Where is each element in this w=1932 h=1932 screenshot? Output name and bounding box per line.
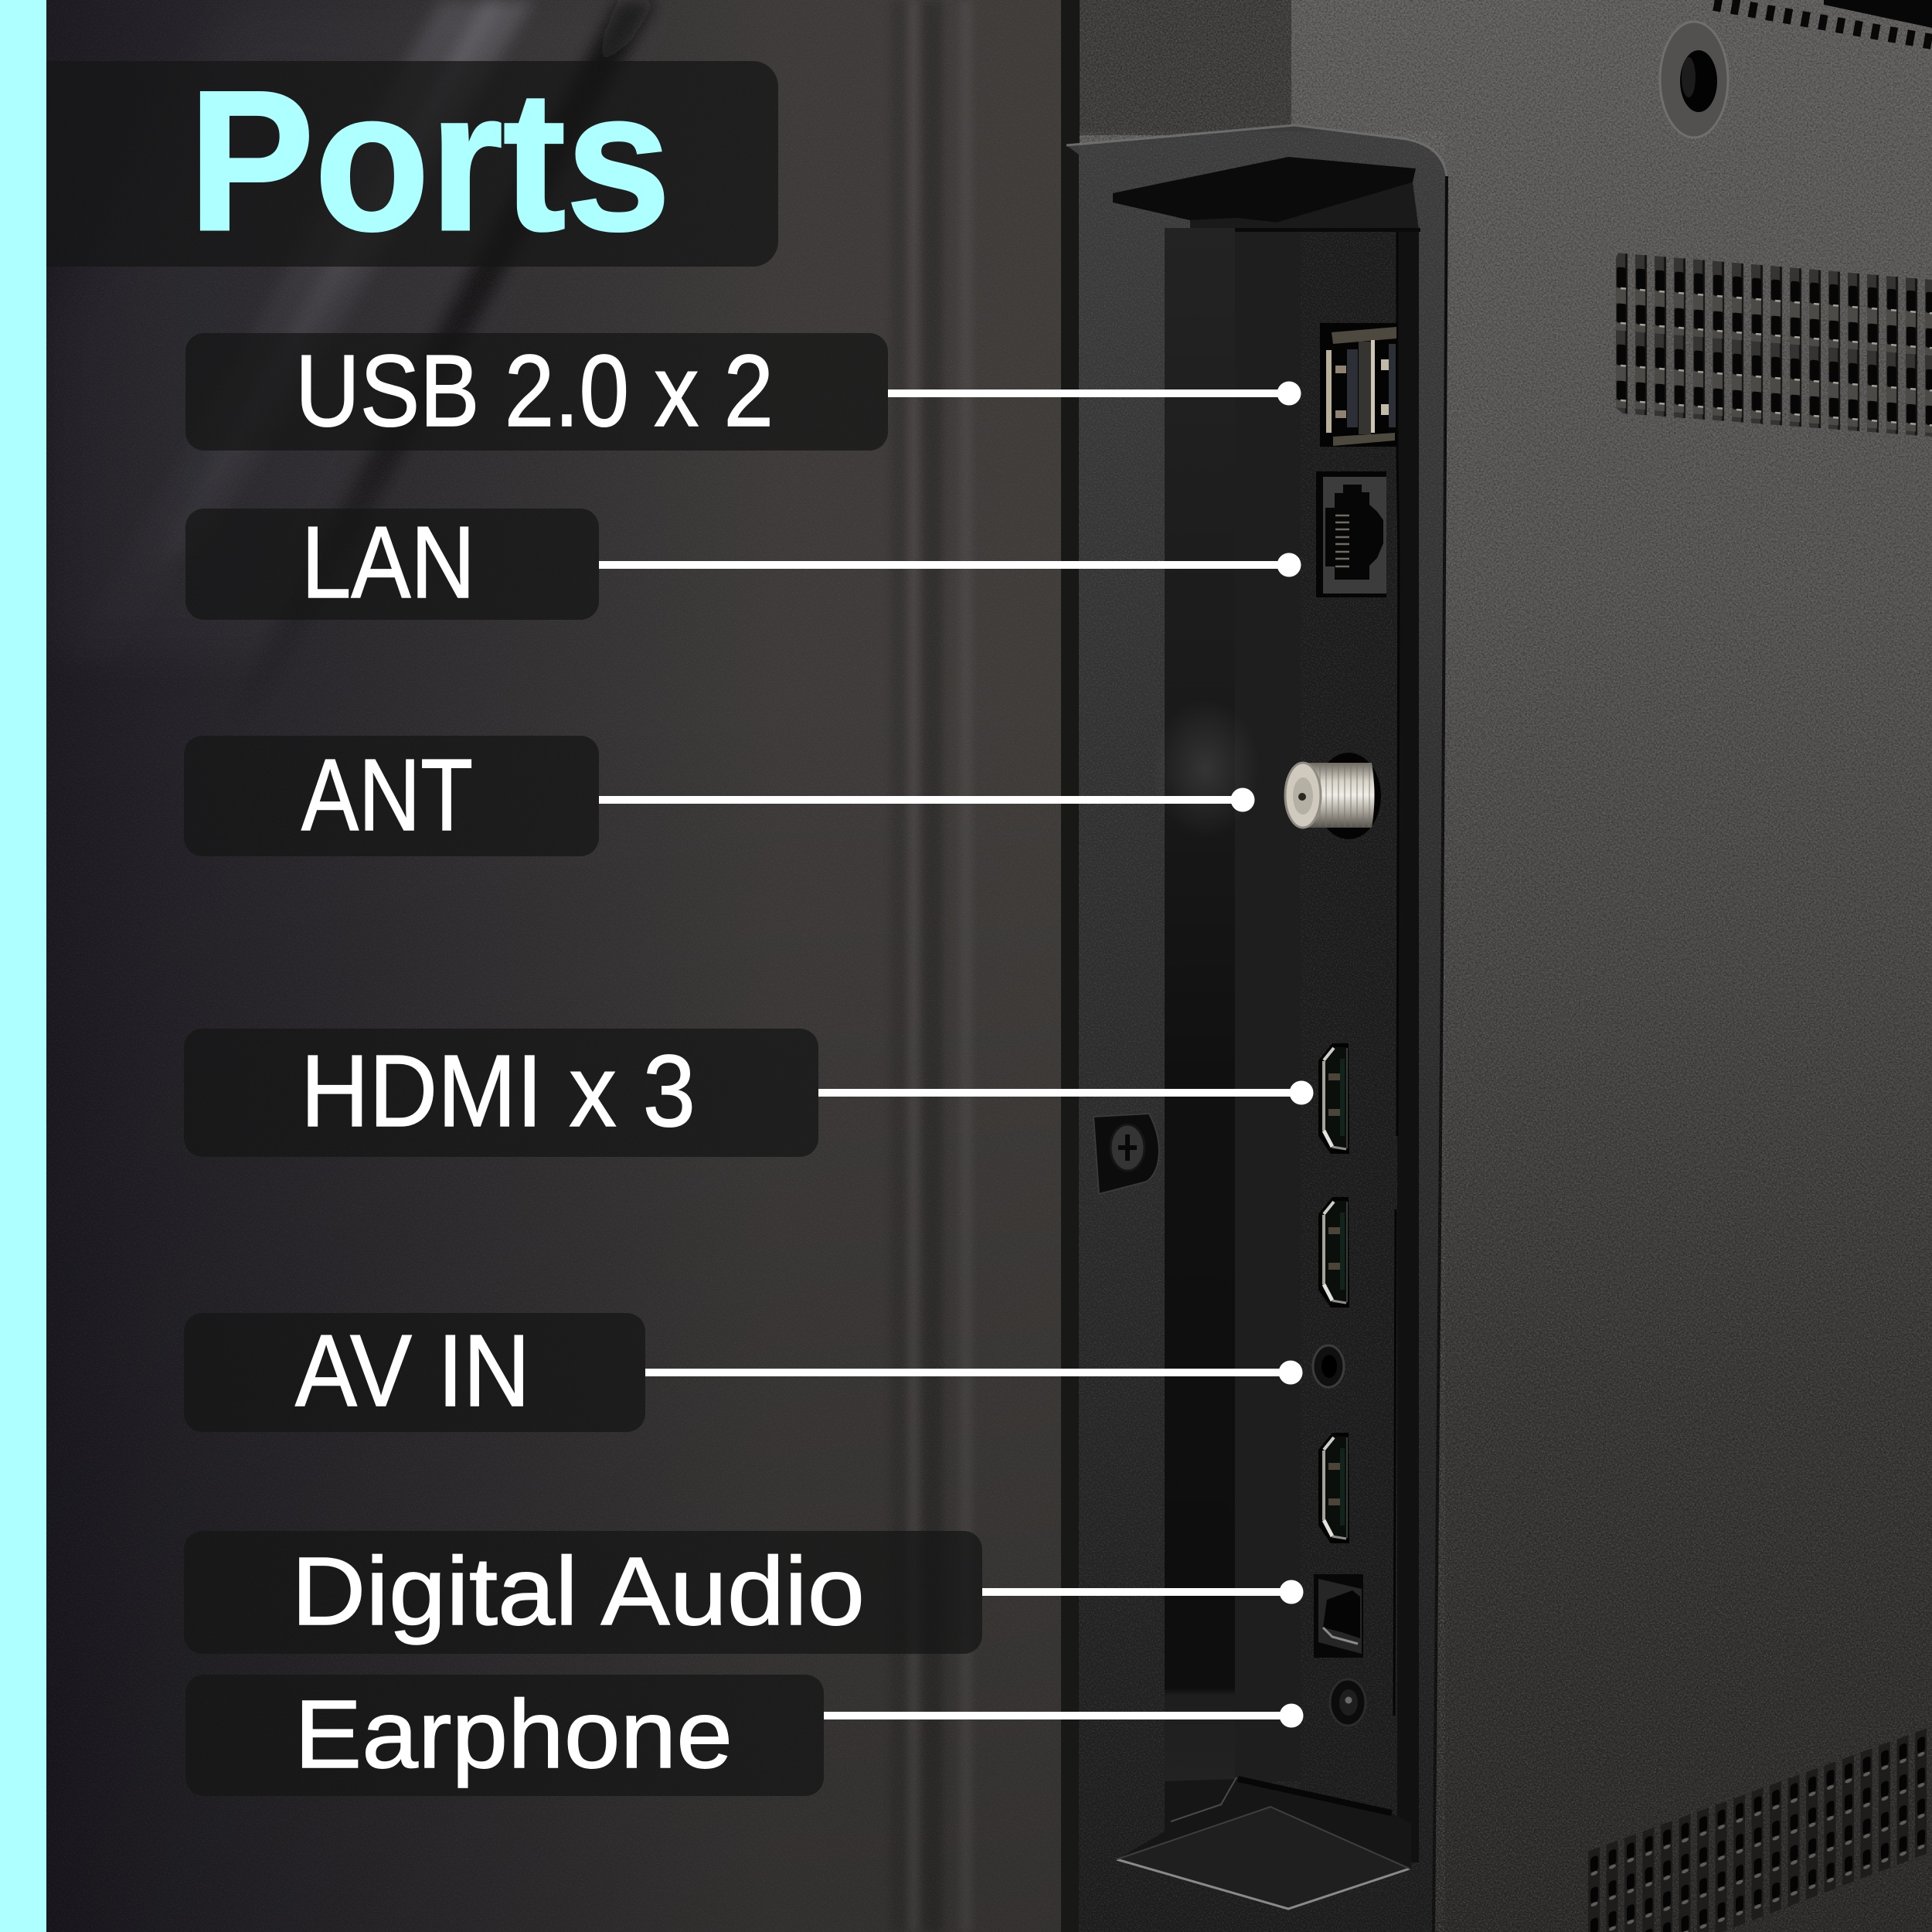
title <box>46 49 778 272</box>
HDMI port 1 <box>1318 1043 1349 1154</box>
HDMI port 3 <box>1318 1433 1349 1543</box>
back panel of the TV <box>1079 0 1932 1932</box>
mounting hole <box>1660 22 1728 138</box>
callout: ANT <box>184 736 1255 856</box>
ventilation slots upper <box>1607 247 1932 440</box>
recess inner strip dark <box>1165 228 1236 1781</box>
port plate <box>1235 228 1420 1862</box>
bezel gap <box>1061 0 1080 1932</box>
reflection glow near antenna <box>1151 699 1260 838</box>
callout: LAN: LAN <box>301 505 475 619</box>
callout: USB: USB 2.0 x 2 <box>295 334 774 447</box>
HDMI port 2 <box>1318 1197 1349 1308</box>
callout: AV IN <box>184 1313 1303 1432</box>
callout: Digital Audio <box>184 1531 1303 1654</box>
screw <box>1094 1114 1159 1194</box>
background wall surface <box>0 0 1082 1932</box>
earphone jack <box>1330 1679 1366 1726</box>
callout: ANT: ANT <box>301 738 473 852</box>
callout: USB <box>185 333 1301 451</box>
antenna connector <box>1285 753 1381 839</box>
AV jack <box>1313 1345 1344 1387</box>
callout: Earphone <box>185 1675 1303 1796</box>
LAN port <box>1316 471 1386 597</box>
port recess frame <box>1066 125 1447 1932</box>
callout: LAN <box>185 505 1301 620</box>
callout: AV IN: AV IN <box>295 1314 530 1427</box>
ventilation slots lower <box>1584 1723 1932 1932</box>
callout: Digital Audio: Digital Audio <box>291 1538 865 1645</box>
recess floor <box>1117 1777 1411 1909</box>
recess inner strip mid <box>1235 228 1301 1781</box>
callout: HDMI <box>184 1029 1314 1157</box>
USB port <box>1320 323 1397 447</box>
recess upper notch <box>1113 157 1416 223</box>
callout: HDMI: HDMI x 3 <box>301 1034 696 1148</box>
accent strip <box>0 0 46 1932</box>
optical audio port <box>1314 1574 1363 1658</box>
recess upper shaded wall <box>1190 182 1419 230</box>
title: Ports <box>189 49 671 272</box>
top vent edge <box>1714 0 1932 42</box>
callout: Earphone: Earphone <box>294 1681 733 1788</box>
